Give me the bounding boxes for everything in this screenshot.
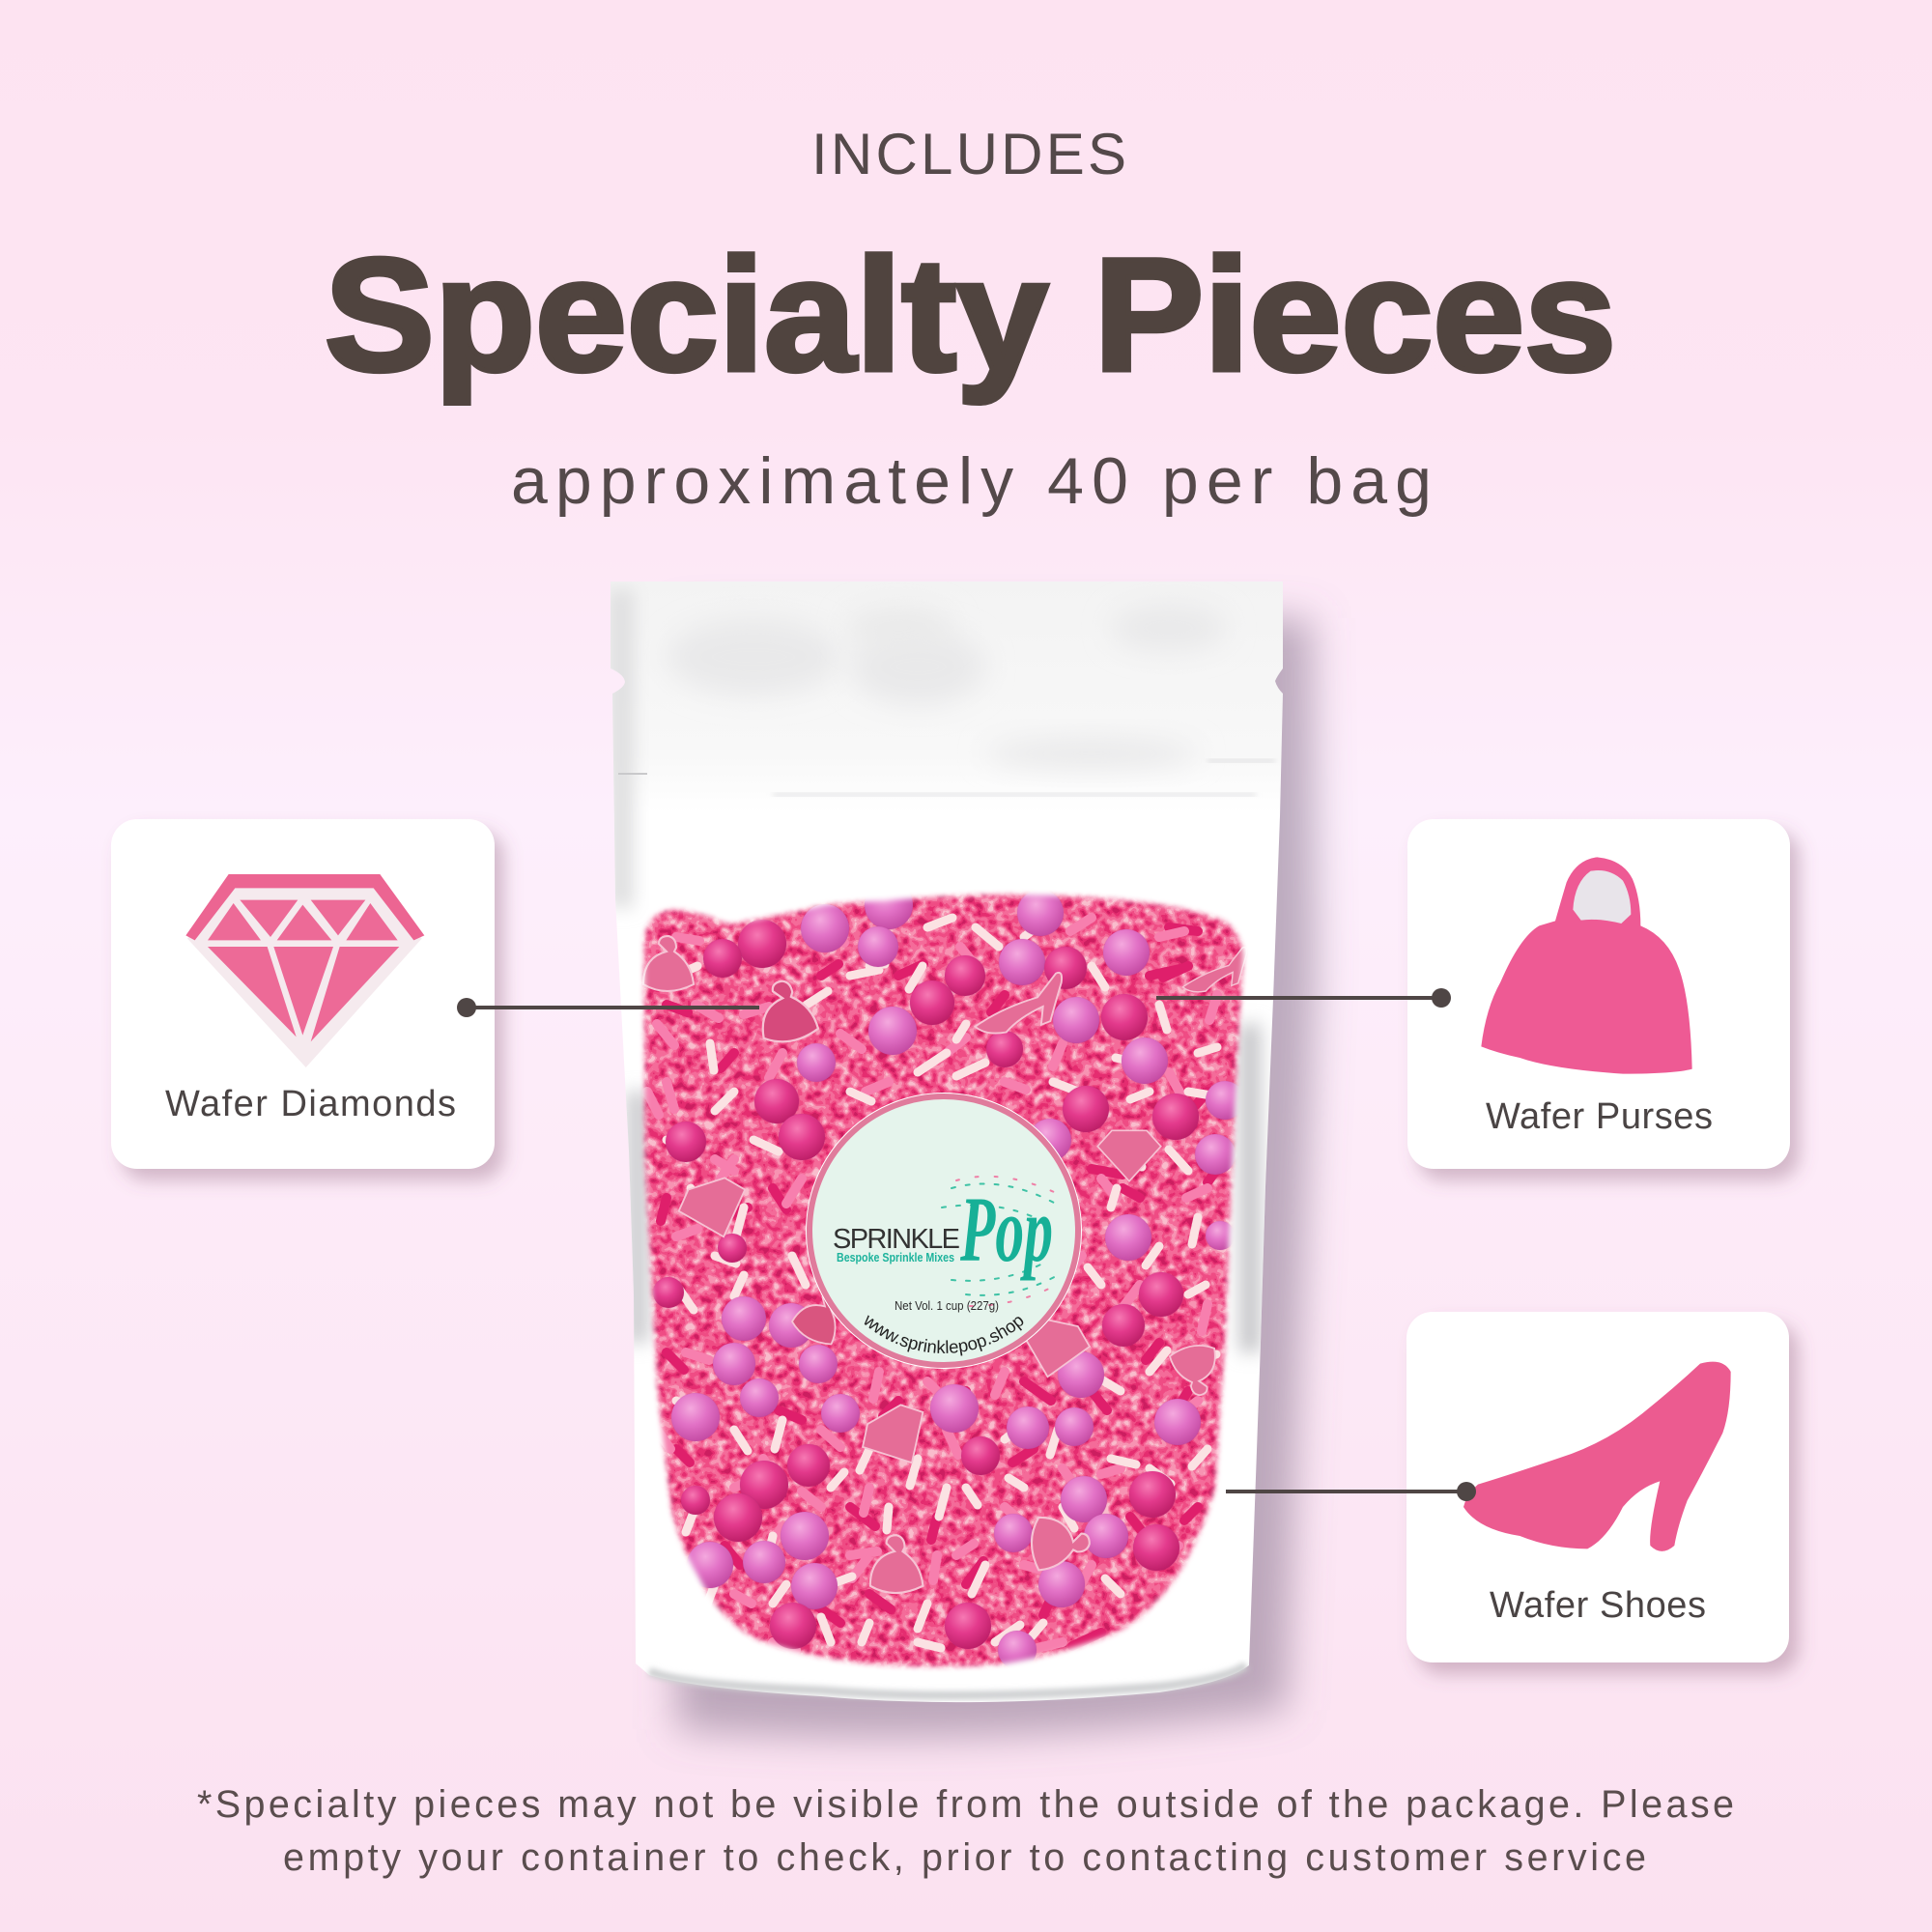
subtitle: approximately 40 per bag <box>511 444 1432 518</box>
label: wafer shoes: Wafer Shoes <box>1490 1585 1706 1626</box>
card: wafer shoes <box>1406 1312 1799 1674</box>
confetti dots pink <box>956 1177 1066 1306</box>
bag shadow <box>676 618 1316 1738</box>
product bag <box>611 582 1283 1702</box>
label: wafer diamonds: Wafer Diamonds <box>165 1084 456 1124</box>
brand tagline: Bespoke Sprinkle Mixes <box>837 1251 954 1264</box>
bag bottom gusset <box>649 1665 1246 1695</box>
sprinkle fill <box>639 891 1247 1671</box>
wafer pieces in bag <box>643 936 1246 1593</box>
net volume: Net Vol. 1 cup (227g) <box>895 1298 999 1313</box>
brand wordmark sprinkle: SPRINKLE <box>833 1224 960 1255</box>
light pink jimmies <box>647 918 1217 1650</box>
label: wafer purses: Wafer Purses <box>1486 1096 1713 1137</box>
hot pink jimmies <box>661 927 1217 1646</box>
bag top wrinkles <box>609 589 1275 1352</box>
brand wordmark pop: Pop <box>959 1178 1053 1281</box>
title: Specialty Pieces <box>325 226 1616 405</box>
connector: purses <box>1156 988 1451 1008</box>
confetti dots <box>942 1184 1063 1295</box>
white jimmies <box>667 918 1217 1648</box>
card: wafer purses <box>1407 819 1800 1180</box>
icon: wafer shoe <box>1463 1362 1731 1551</box>
icon: wafer diamond <box>185 874 424 1067</box>
card: wafer diamonds <box>111 819 504 1180</box>
sprinkle nonpareil texture <box>639 891 1247 1671</box>
icon: wafer purse <box>1481 857 1692 1074</box>
brand label <box>806 1093 1082 1369</box>
bag body <box>611 582 1283 1702</box>
footnote: *Specialty pieces may not be visible from the outside of the package. Please <box>197 1783 1734 1826</box>
eyebrow: includes: INCLUDES <box>811 122 1126 186</box>
footnote: empty your container to check, prior to contacting customer service <box>283 1836 1646 1879</box>
connector: shoes <box>1226 1482 1476 1501</box>
website: www.sprinklepop.shop <box>864 1315 1024 1356</box>
footnote <box>197 1783 1734 1879</box>
infographic canvas <box>111 133 1812 1878</box>
pearl spheres <box>653 881 1244 1669</box>
connector: diamonds <box>457 998 759 1017</box>
